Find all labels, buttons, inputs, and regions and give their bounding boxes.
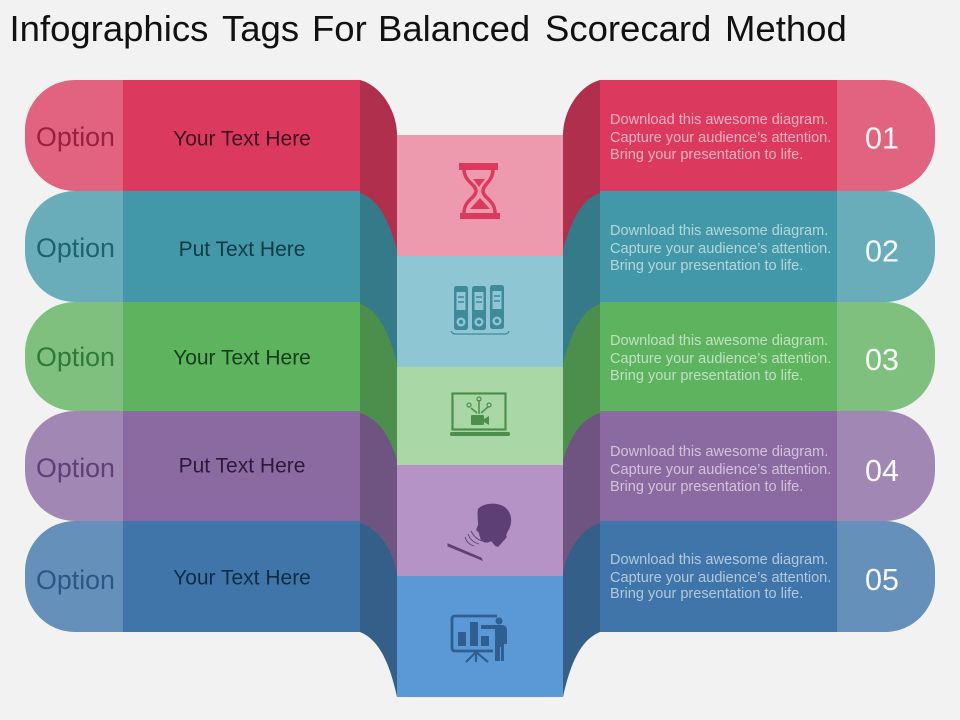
panel: option row 1 left: Option (36, 122, 115, 152)
panel: description row 5 right (563, 521, 935, 697)
panel: description row 1 right (563, 80, 935, 270)
panel: option row 3 left: Your Text Here (173, 346, 311, 370)
title: Infographics (10, 8, 208, 49)
panel: description row 2 right: Capture your audience’s attention. (610, 241, 831, 257)
panel: description row 1 right: 01 (865, 122, 899, 156)
title: For (312, 8, 367, 49)
title: Method (725, 8, 847, 49)
panel: option row 1 left: Your Text Here (173, 128, 311, 150)
panel: option row 2 left: Option (36, 233, 115, 263)
panel: description row 2 right: Download this awesome diagram. (610, 223, 828, 239)
icon: presenter with chart (452, 616, 507, 662)
panel: description row 1 right: Capture your audience’s attention. (610, 130, 831, 146)
title: Tags (222, 8, 299, 49)
panel: option row 2 left: Put Text Here (179, 238, 305, 261)
panel: option row 1 left (25, 80, 397, 270)
icon: speaking head (448, 504, 511, 560)
panel: description row 3 right: Capture your audience’s attention. (610, 351, 831, 367)
icon: hourglass (459, 163, 500, 219)
panel: description row 3 right: Download this awesome diagram. (610, 333, 828, 349)
panel: description row 5 right: Download this awesome diagram. (610, 552, 828, 568)
panel: description row 4 right: Bring your presentation to life. (610, 479, 803, 495)
icon: laptop with camera (450, 394, 510, 436)
title: Scorecard (545, 8, 711, 49)
panel: description row 2 right: 02 (865, 234, 899, 268)
panel: description row 5 right: Bring your presentation to life. (610, 586, 803, 602)
icon: binders (451, 285, 509, 334)
panel: description row 4 right: 04 (865, 454, 899, 488)
panel: centre column (397, 135, 563, 697)
panel: description row 5 right: 05 (865, 563, 899, 597)
panel: option row 3 left (25, 302, 397, 470)
panel: description row 1 right: Download this awesome diagram. (610, 112, 828, 128)
panel: option row 5 left: Option (36, 565, 115, 595)
panel: option row 4 left: Option (36, 453, 115, 483)
panel: description row 4 right: Download this awesome diagram. (610, 444, 828, 460)
panel: description row 1 right: Bring your presentation to life. (610, 147, 803, 163)
panel: option row 4 left (25, 411, 397, 580)
panel: description row 2 right: Bring your presentation to life. (610, 258, 803, 274)
title: Balanced (378, 8, 530, 49)
panel: description row 5 right: Capture your audience’s attention. (610, 570, 831, 586)
panel: option row 4 left: Put Text Here (179, 454, 305, 478)
panel: option row 5 left (25, 521, 397, 697)
panel: option row 5 left: Your Text Here (173, 566, 311, 590)
panel: description row 3 right: Bring your presentation to life. (610, 368, 803, 384)
panel: option row 2 left (25, 191, 397, 380)
panel: description row 4 right: Capture your audience’s attention. (610, 462, 831, 478)
panel: option row 3 left: Option (36, 342, 115, 372)
panel: description row 3 right: 03 (865, 343, 899, 377)
panel: description row 2 right (563, 191, 935, 380)
panel: description row 4 right (563, 411, 935, 580)
panel: description row 3 right (563, 302, 935, 470)
